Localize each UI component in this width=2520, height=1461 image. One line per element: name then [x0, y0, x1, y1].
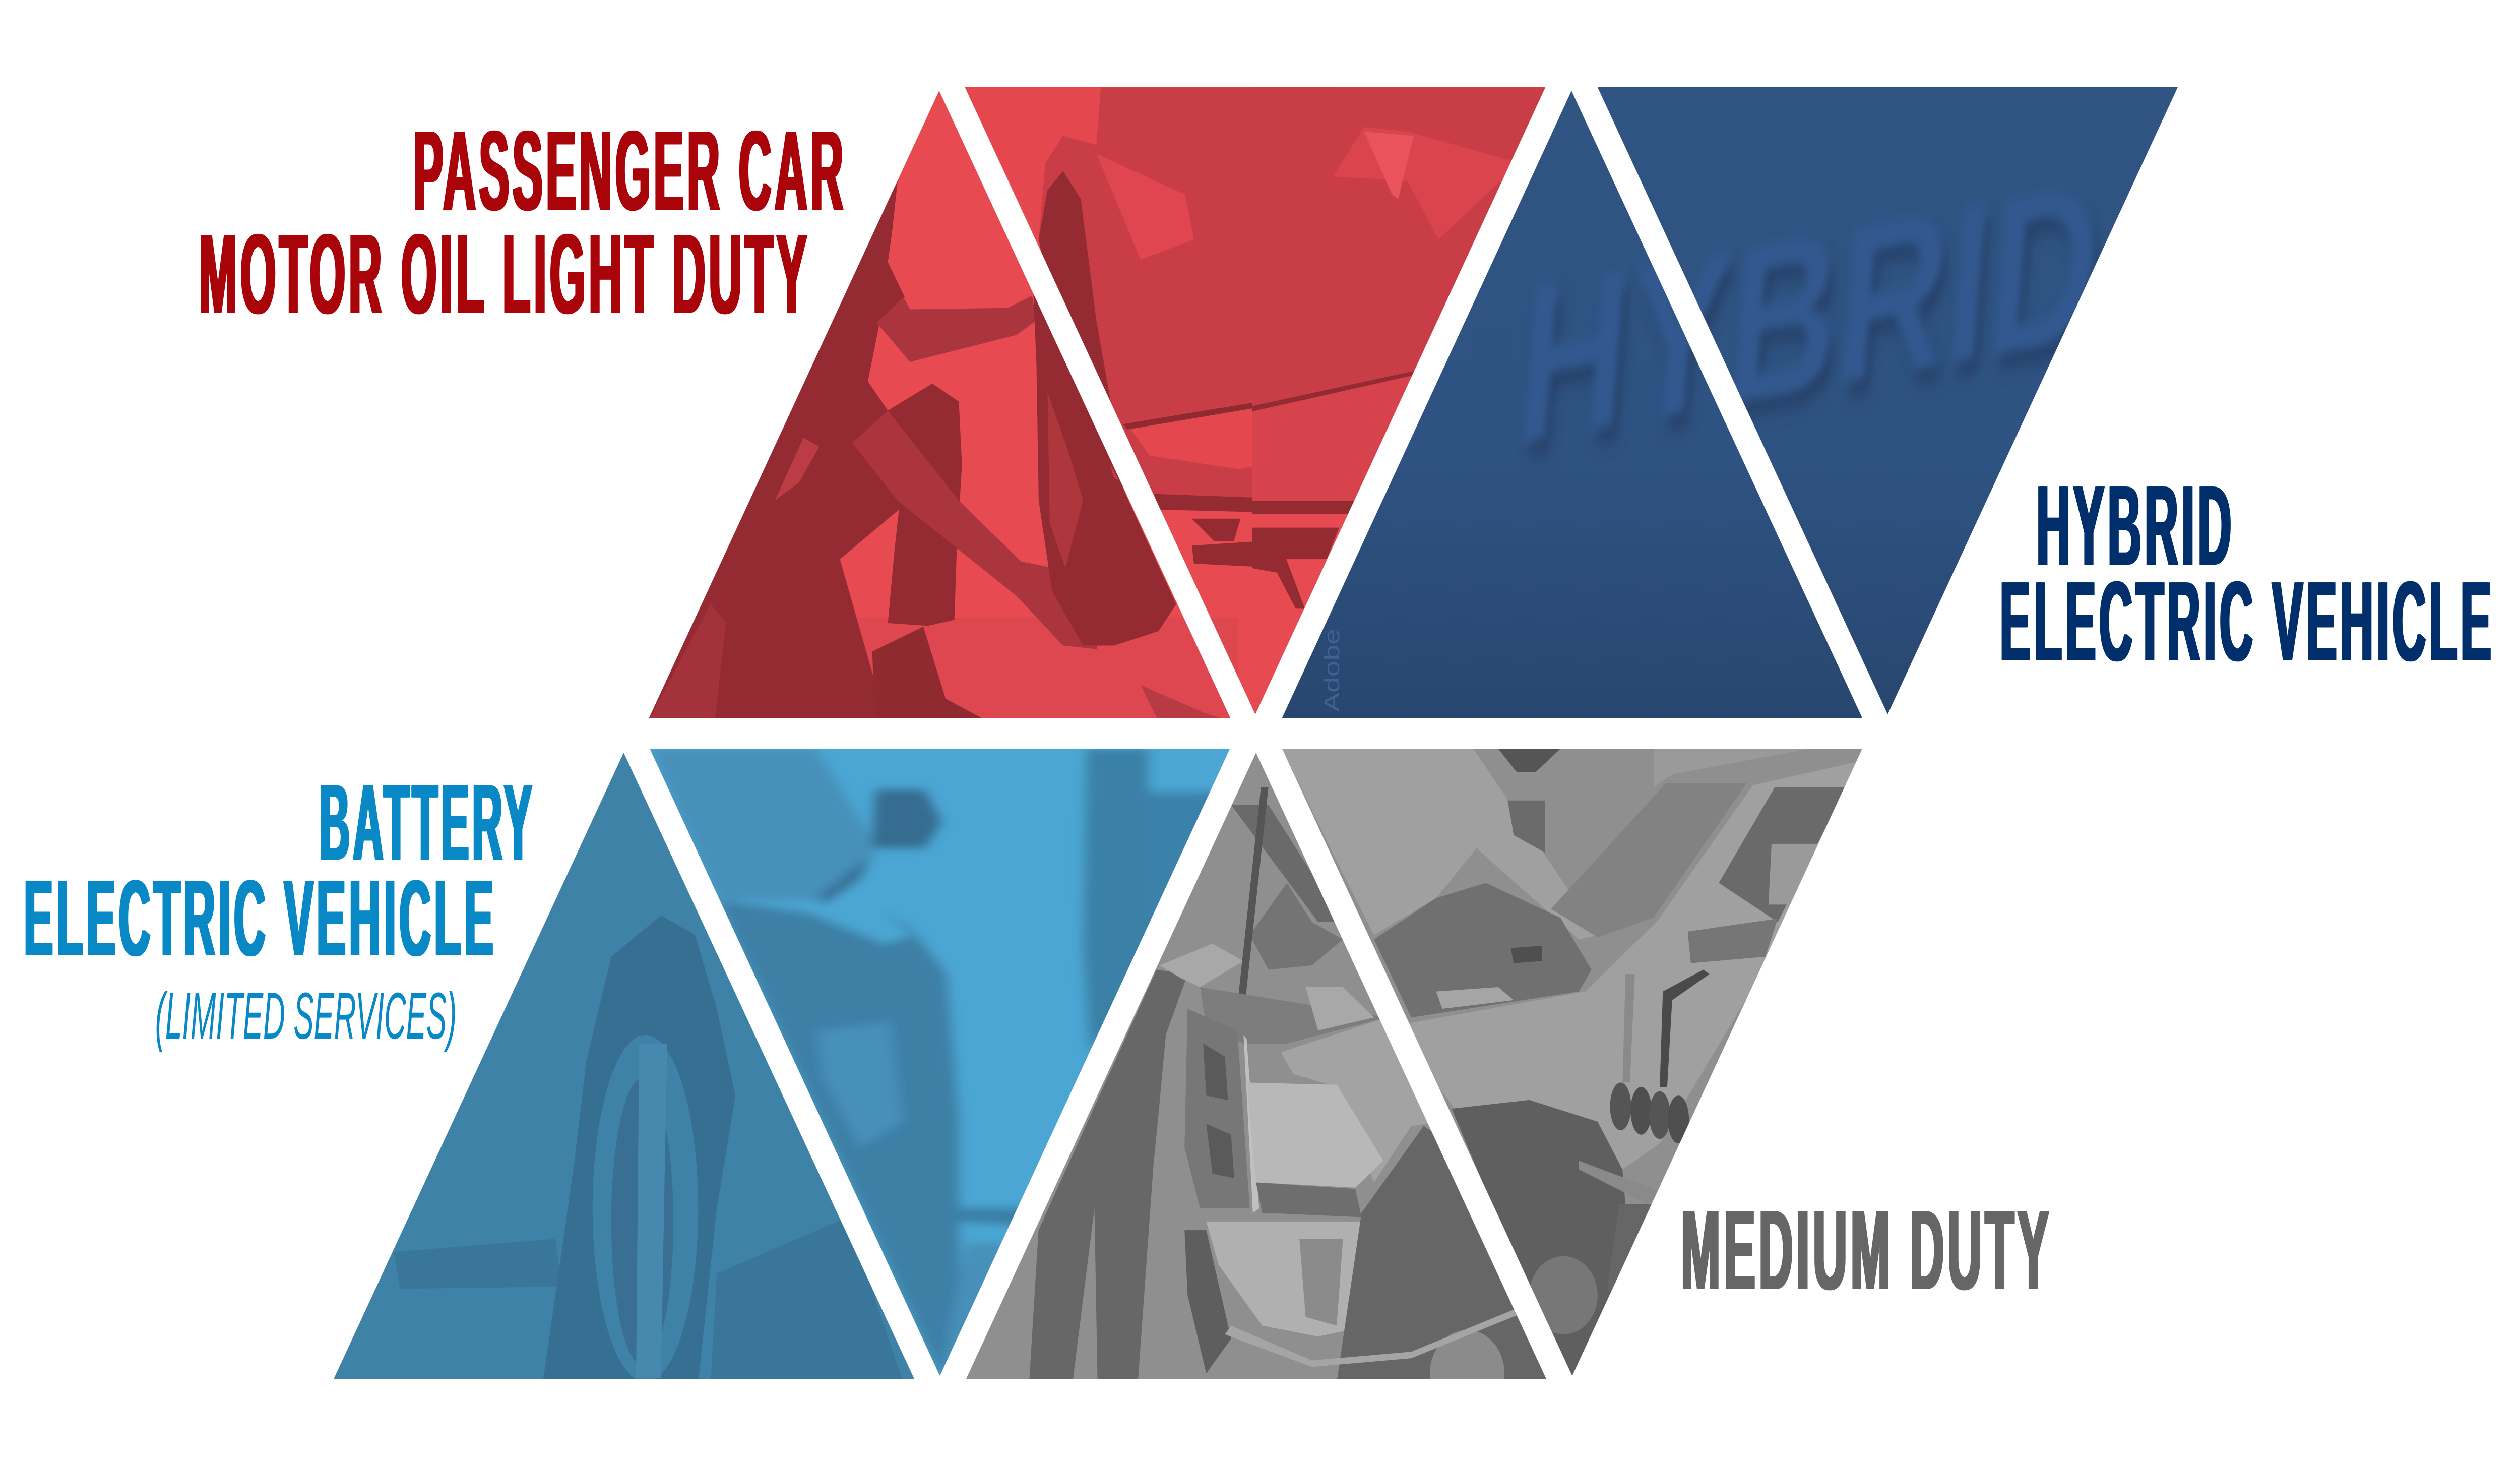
panel: passenger car photo triangles (red) [649, 87, 1545, 718]
photo lettering: HYBRID badge: HYBRID [1509, 133, 2109, 492]
grille [1184, 1009, 1250, 1208]
bumper [1206, 1222, 1362, 1336]
engine bay [1374, 883, 1592, 1017]
heading: medium duty: MEDIUM DUTY [1680, 1186, 2051, 1313]
left triangle car [313, 748, 934, 1382]
mirror [1688, 919, 1778, 963]
heading: passenger car motor oil light duty: PASSENGER CAR [412, 107, 845, 234]
wheel well [1452, 1100, 1629, 1382]
gauges and hoses [1610, 1082, 1631, 1130]
car body upper [1038, 87, 1252, 498]
heading: battery electric vehicle [23, 762, 534, 978]
heading: battery electric vehicle: ELECTRIC VEHICLE [23, 858, 495, 978]
cab body [1393, 761, 1859, 1170]
inverted triangle blurred car [650, 749, 1245, 1378]
photo lettering: HYBRID badge: HYBRID [1515, 149, 2115, 508]
front wheel arch and tyre [1337, 1126, 1551, 1382]
panel: battery electric photo triangles (blue) [334, 749, 1230, 1379]
side window [1719, 787, 1846, 922]
right part of the red photo [1252, 87, 1550, 717]
fender [1281, 1017, 1442, 1182]
windshield [1551, 783, 1747, 937]
heading: battery electric vehicle: BATTERY [318, 762, 534, 882]
second truck raised hood [1282, 749, 1599, 939]
panel: medium duty photo triangles (gray) [966, 749, 1862, 1379]
headlight [1246, 1082, 1383, 1188]
heading: passenger car motor oil light duty: MOTOR OIL LIGHT DUTY [198, 210, 809, 337]
mechanic [1029, 970, 1187, 1382]
photo watermark: Adobe [1320, 629, 1344, 712]
raised hood and strut [1231, 805, 1343, 922]
heading: hybrid electric vehicle [1998, 462, 2493, 685]
left part of the red photo, zoom coordinates [626, 87, 1336, 721]
engine [1200, 987, 1387, 1044]
panel: hybrid photo triangles (navy) [1282, 87, 2178, 718]
heading: passenger car motor oil light duty [198, 107, 845, 337]
note: limited services: (LIMITED SERVICES) [155, 979, 457, 1053]
heading: hybrid electric vehicle: HYBRID [2035, 462, 2233, 589]
